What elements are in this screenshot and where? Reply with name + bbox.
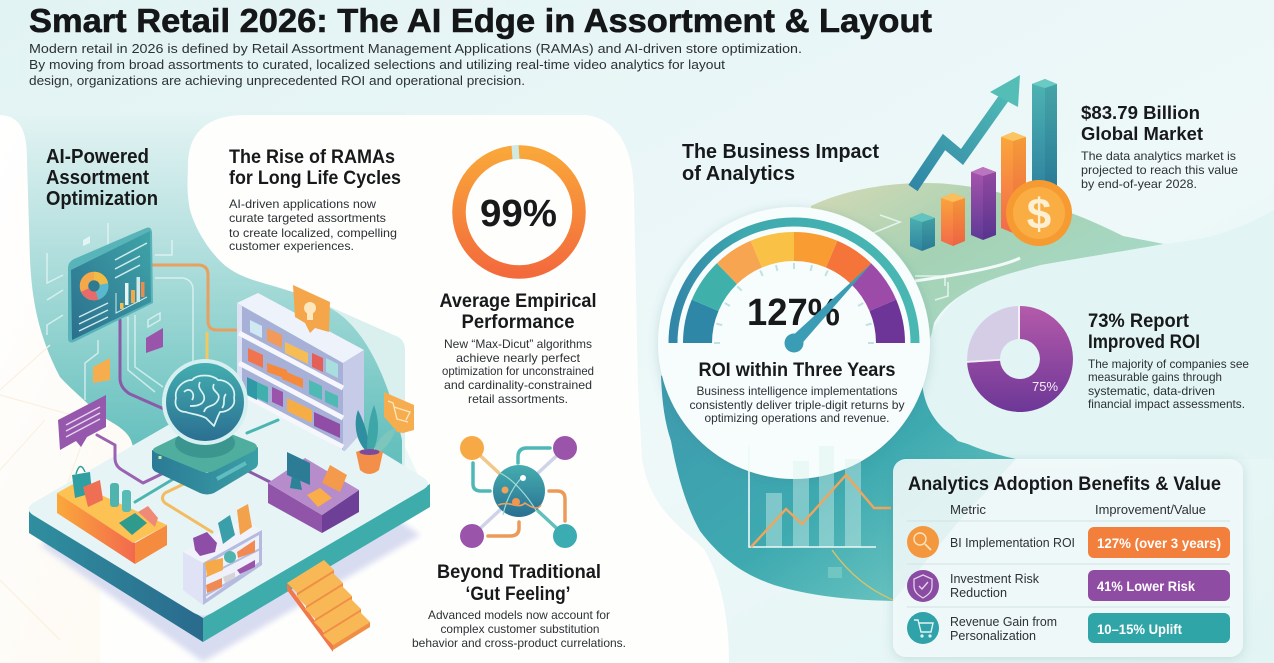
small display shelf [183,504,262,605]
background: green swoosh behind bar chart [811,183,1164,380]
chart: rising bar chart with arrow and coin: $ [1027,190,1051,239]
stat: $83.79 Billion Global Market: Global Market [1081,123,1203,144]
background: dark teal swoosh under gauge [661,330,1016,601]
section: The Rise of RAMAs: The Rise of RAMAs [229,147,395,168]
gauge segments [683,232,905,343]
section: Beyond Traditional Gut Feeling: complex customer substitution [440,622,600,636]
stat: 73% Report Improved ROI: 73% Report [1088,311,1190,332]
platform [28,377,430,662]
intro paragraph: design, organizations are achieving unprecedented ROI and operational precision. [29,73,525,88]
mini bar and line chart [749,446,893,600]
purple speech bubble [58,395,106,450]
section heading: AI-Powered Assortment Optimization: Assortment [46,167,149,189]
intro paragraph: By moving from broad assortments to curated, localized selections and utilizing real-time video analytics for layout [29,57,725,72]
gauge value: 127% [747,292,840,334]
gauge caption: optimizing operations and revenue. [704,411,890,425]
gauge caption: Business intelligence implementations [696,384,898,398]
row: BI Implementation ROI: 127% (over 3 years) [1097,536,1221,551]
gauge outer ring [673,222,915,343]
row: Revenue Gain from Personalization [907,612,1230,644]
gauge ticks [714,263,874,343]
gauge caption: ROI within Three Years [698,360,896,381]
stairs [287,560,370,652]
stat: $83.79 Billion Global Market: projected to reach this value [1081,163,1238,177]
row: Revenue Gain from Personalization: Revenue Gain from [950,615,1057,629]
row: BI Implementation ROI [907,526,1230,558]
section: The Rise of RAMAs: to create localized, compelling [229,226,397,240]
section: Beyond Traditional Gut Feeling [412,562,626,650]
section heading: AI-Powered Assortment Optimization: Optimization [46,188,158,210]
background: left cream area [0,115,210,663]
section heading: AI-Powered Assortment Optimization: AI-Powered [46,146,149,168]
stat: 73% Report Improved ROI: measurable gains through [1088,370,1222,384]
heading: The Business Impact of Analytics: of Analytics [682,163,795,185]
potted plant [356,405,396,474]
stat: $83.79 Billion Global Market: $83.79 Billion [1081,102,1200,123]
stat: 73% Report Improved ROI: financial impact assessments. [1088,397,1245,411]
AI brain sphere on hub [152,359,258,494]
shelving unit [237,293,364,451]
gauge caption [690,360,904,425]
table header [950,503,1206,517]
section: The Rise of RAMAs: AI-driven applications now [229,197,376,211]
chart: 75% donut: 75% [1032,379,1058,394]
background: central white panel [100,115,729,663]
table header: Improvement/Value [1095,503,1206,517]
stat: $83.79 Billion Global Market [1081,102,1238,191]
section: The Rise of RAMAs: curate targeted assortments [229,211,386,225]
stat: $83.79 Billion Global Market: by end-of-year 2028. [1081,177,1197,191]
chart: 99% ring [459,152,579,272]
row: Investment Risk Reduction: Investment Risk [950,572,1040,586]
row: Investment Risk Reduction: 41% Lower Risk [1097,579,1195,594]
background: pale panel behind shelf [320,307,405,490]
intro paragraph [29,41,802,88]
chart: rising bar chart with arrow and coin [910,75,1072,281]
chart: 99% ring: 99% [480,193,557,235]
row: BI Implementation ROI: BI Implementation ROI [950,536,1075,550]
section: The Rise of RAMAs: for Long Life Cycles [229,168,401,189]
background: teal patch behind shelf [300,300,402,500]
icon: light bulb tag [293,285,330,333]
gauge card: 127% ROI [658,207,930,479]
section: Average Empirical Performance [440,291,596,406]
heading: The Business Impact of Analytics: The Business Impact [682,141,879,163]
chart: 75% donut [967,306,1073,412]
background: pale circle behind donut [922,210,1274,459]
section: Beyond Traditional Gut Feeling: Beyond Traditional [437,562,601,583]
section: Average Empirical Performance: New “Max-Dicut” algorithms [444,337,592,351]
stat: $83.79 Billion Global Market: The data analytics market is [1081,149,1236,163]
section: Average Empirical Performance: Performance [462,312,574,333]
table title: Analytics Adoption Benefits & Value [908,473,1221,495]
icon: cart tag [384,392,414,433]
white circuit lines [47,223,193,400]
row: Investment Risk Reduction [907,570,1230,602]
intro paragraph: Modern retail in 2026 is defined by Retail Assortment Management Applications (RAMAs) and AI-driven store optimization. [29,41,802,56]
purple checkout counter [268,452,359,533]
gauge caption: consistently deliver triple-digit returns by [690,398,904,412]
section heading: AI-Powered Assortment Optimization [46,146,158,210]
section: Beyond Traditional Gut Feeling: ‘Gut Feeling’ [466,584,570,605]
section: Average Empirical Performance: retail assortments. [468,392,568,406]
section: Average Empirical Performance: and cardinality-constrained [444,378,592,392]
row: Investment Risk Reduction: Reduction [950,586,1007,600]
background: left teal panel [0,112,405,530]
floating tiles [83,236,163,383]
stat: 73% Report Improved ROI: systematic, data-driven [1088,384,1215,398]
orange product counter [57,466,167,564]
table header: Metric [950,503,986,517]
icon: network globe [460,436,577,548]
dashboard screen [68,228,153,342]
stat: 73% Report Improved ROI [1088,311,1249,411]
row: Revenue Gain from Personalization: 10–15% Uplift [1097,622,1182,637]
section: The Rise of RAMAs [229,147,401,253]
section: The Rise of RAMAs: customer experiences. [229,239,354,253]
section: Average Empirical Performance: achieve nearly perfect [456,351,581,365]
illustration: isometric smart store [28,223,430,662]
decorative circuit traces behind chart [873,215,948,300]
background: faint cream lines [0,345,90,640]
stat: 73% Report Improved ROI: The majority of companies see [1088,357,1249,371]
connector wires [97,265,278,532]
gauge needle [784,263,872,352]
section: Beyond Traditional Gut Feeling: behavior and cross-product currelations. [412,636,626,650]
title: Smart Retail 2026: The AI Edge in Assortment & Layout [29,2,932,39]
section: Average Empirical Performance: optimization for unconstrained [442,364,594,378]
table card: Analytics Adoption Benefits & Value [893,459,1243,657]
stat: 73% Report Improved ROI: Improved ROI [1088,332,1200,353]
section: Beyond Traditional Gut Feeling: Advanced models now account for [428,608,610,622]
section: Average Empirical Performance: Average Empirical [440,291,596,312]
row: Revenue Gain from Personalization: Personalization [950,629,1036,643]
heading: The Business Impact of Analytics [682,141,879,185]
